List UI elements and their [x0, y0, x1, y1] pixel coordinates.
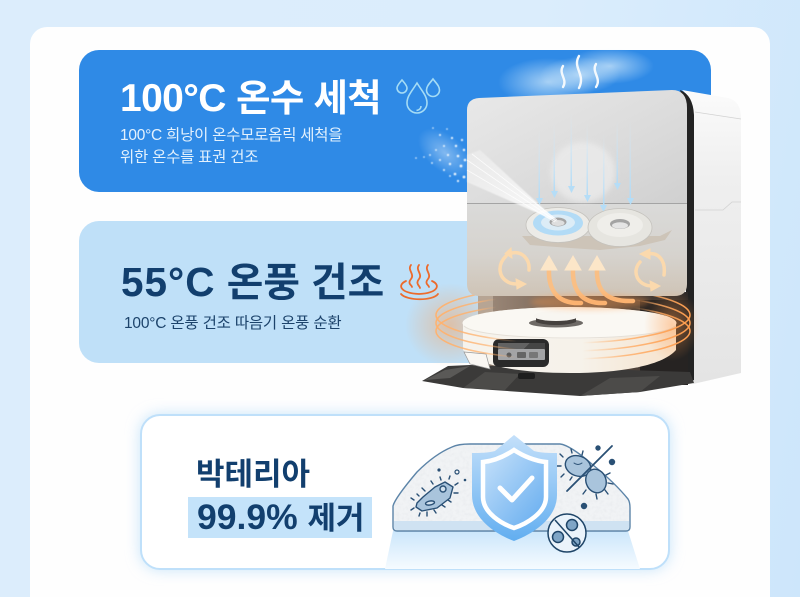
right mop pad — [588, 208, 652, 246]
hot air up arrows — [541, 256, 633, 303]
panel: warm air dry — [79, 221, 499, 363]
crossed-out germ badge — [548, 514, 586, 552]
icon: water drops — [397, 79, 440, 113]
icon: heat waves — [401, 265, 438, 299]
warm glow left — [405, 283, 495, 367]
station body rear — [478, 90, 741, 385]
station front panels — [467, 90, 687, 296]
station upper front — [467, 90, 687, 204]
station lower front — [467, 204, 687, 296]
left mop pad — [526, 208, 590, 242]
robot wheel — [518, 373, 535, 379]
circulation arrows left — [500, 248, 529, 289]
mop pads — [522, 208, 672, 250]
water jet — [467, 150, 558, 222]
text: hot water wash description: 위한 온수를 표권 건조 — [120, 149, 258, 166]
steam above station — [498, 48, 654, 106]
heading: warm air dry: 55°C 온풍 건조 — [121, 259, 384, 305]
small dots — [437, 468, 466, 481]
icon: steam wisps — [562, 56, 598, 88]
circulation arrows right — [636, 249, 664, 291]
text: hot water wash description — [120, 127, 342, 166]
station side panel — [682, 90, 741, 384]
mop tray — [522, 230, 672, 250]
highlighted text: 99.9 percent removal: 99.9% 제거 — [197, 497, 365, 537]
robot bumper — [464, 352, 490, 369]
warm glow under bay — [530, 294, 650, 310]
robot vacuum — [462, 307, 676, 379]
crossed bacterium — [556, 446, 614, 508]
panel: bacteria removal — [140, 414, 670, 570]
shield — [472, 435, 557, 541]
bacteria illustration — [385, 435, 640, 569]
panel: hot water wash — [79, 50, 711, 192]
heading: hot water wash: 100°C 온수 세척 — [120, 77, 381, 120]
robot front sensor — [493, 339, 549, 367]
left bacterium — [411, 476, 458, 516]
arrow heads — [536, 183, 634, 212]
back of heat rings — [436, 287, 690, 331]
front of heat rings — [436, 315, 690, 359]
airflow down arrows — [538, 112, 631, 207]
check mark — [500, 478, 532, 500]
mop pad — [393, 444, 630, 531]
text: warm air dry description: 100°C 온풍 건조 따음기 온풍 순환 — [124, 315, 341, 332]
base tray — [422, 365, 694, 396]
lower bay — [478, 292, 688, 385]
inner steam — [551, 142, 615, 202]
text: hot water wash description: 100°C 희낭이 온수모로옴릭 세척을 — [120, 127, 342, 144]
heading: bacteria: 박테리아 — [196, 457, 310, 492]
water spray on panel — [409, 119, 481, 187]
warm glow right — [644, 289, 700, 361]
station black seam — [680, 90, 694, 383]
light beam — [385, 531, 640, 569]
lidar turret — [529, 318, 583, 328]
